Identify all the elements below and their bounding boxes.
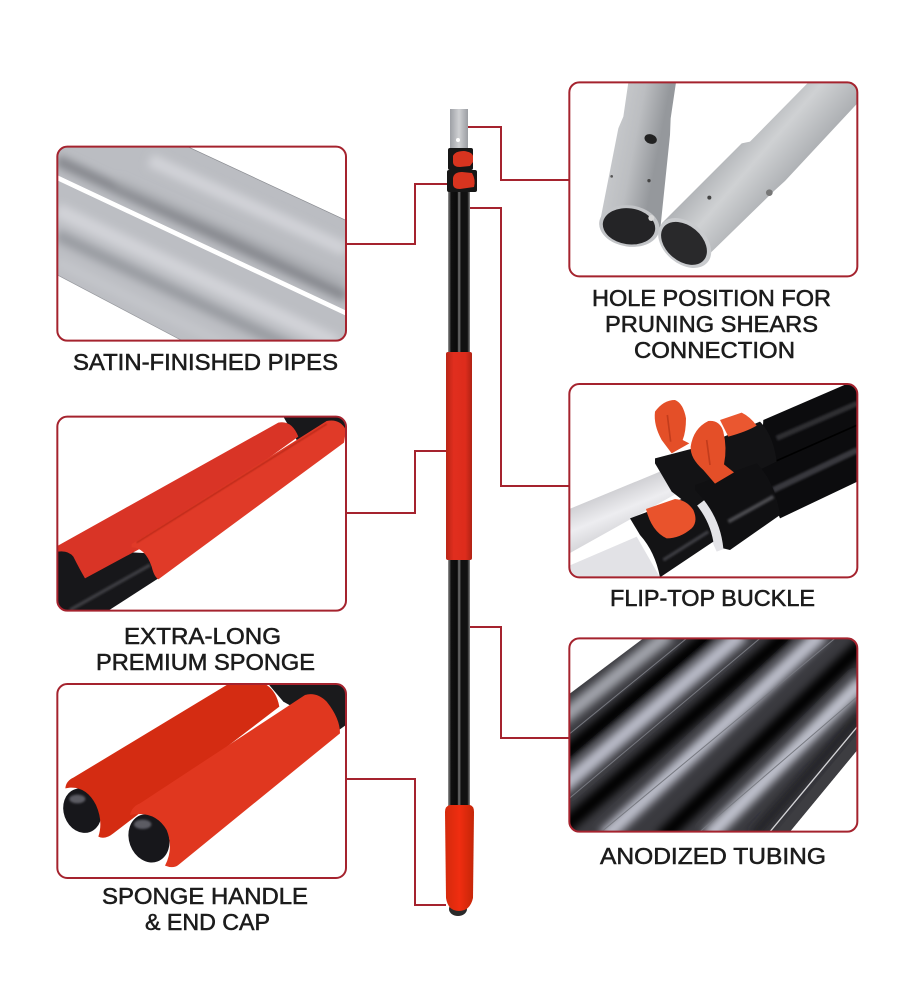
black tube ends bbox=[268, 684, 346, 732]
connector: anodized tubing bbox=[470, 627, 570, 738]
label: extra-long premium sponge bbox=[96, 623, 315, 675]
end cap right bbox=[128, 814, 170, 862]
lower white tube bbox=[569, 537, 660, 577]
label: extra-long premium sponge: EXTRA-LONG bbox=[124, 623, 281, 649]
label: hole position for pruning shears connection: PRUNING SHEARS bbox=[605, 311, 818, 337]
panel border bbox=[57, 684, 346, 878]
label: flip-top buckle: FLIP-TOP BUCKLE bbox=[610, 585, 815, 611]
panel: premium sponge bbox=[57, 417, 346, 611]
connector: flip-top buckle bbox=[470, 208, 570, 486]
front buckle lever bbox=[691, 421, 734, 484]
flat buckle lever bbox=[646, 499, 695, 538]
connector: hole position bbox=[466, 127, 570, 180]
panel border bbox=[569, 82, 857, 276]
front sponge bbox=[130, 694, 340, 867]
near clamp bbox=[630, 498, 713, 577]
label: anodized tubing: ANODIZED TUBING bbox=[600, 843, 826, 869]
lower silver tube bbox=[57, 180, 346, 353]
label: satin-finished pipes: SATIN-FINISHED PIPES bbox=[73, 349, 338, 375]
label: hole position for pruning shears connection bbox=[592, 285, 831, 363]
panel: flip-top buckle bbox=[569, 384, 857, 577]
label: sponge handle and end cap: SPONGE HANDLE bbox=[102, 883, 308, 909]
rear sponge bbox=[65, 685, 279, 838]
panel border bbox=[569, 384, 857, 577]
panel: sponge handle and end cap bbox=[57, 684, 346, 878]
front clamp bbox=[704, 469, 779, 550]
black tubes bbox=[567, 638, 857, 833]
label: hole position for pruning shears connection: HOLE POSITION FOR bbox=[592, 285, 831, 311]
rear sponge bbox=[57, 422, 298, 578]
back flat lever bbox=[720, 413, 757, 437]
connector: satin-finished pipes bbox=[346, 184, 448, 244]
panel: anodized tubing bbox=[567, 638, 857, 833]
rear buckle lever bbox=[655, 400, 689, 453]
panel: hole position for pruning shears bbox=[569, 82, 857, 278]
pole: lower clamp bbox=[447, 170, 477, 192]
black tube tip bbox=[283, 417, 346, 440]
label: hole position for pruning shears connection: CONNECTION bbox=[634, 337, 795, 363]
left silver tube bbox=[596, 82, 676, 251]
pole: upper black tube bbox=[448, 190, 470, 354]
panel border bbox=[57, 147, 346, 341]
central telescopic pole bbox=[445, 109, 477, 916]
pole: silver tip bbox=[450, 109, 468, 151]
connector: sponge handle bbox=[346, 779, 446, 905]
panel: satin-finished pipes bbox=[57, 147, 346, 353]
panel border bbox=[569, 638, 857, 832]
connector: premium sponge bbox=[346, 451, 446, 513]
panel border bbox=[57, 417, 346, 611]
white gap tube bbox=[697, 501, 724, 552]
pole: lower black tube bbox=[448, 558, 470, 808]
black tube section bbox=[57, 548, 158, 611]
pole: upper clamp bbox=[448, 148, 473, 170]
upper silver tube bbox=[57, 147, 346, 311]
label: sponge handle and end cap bbox=[102, 883, 308, 935]
pole: long red sponge bbox=[446, 352, 472, 560]
right silver tube bbox=[658, 83, 856, 268]
pole: red sponge grip bbox=[445, 805, 474, 911]
label: sponge handle and end cap: & END CAP bbox=[145, 909, 270, 935]
end cap left bbox=[63, 788, 100, 833]
black tubes bbox=[760, 384, 857, 518]
rear clamp bbox=[655, 422, 777, 508]
pole: bottom end cap bbox=[449, 902, 467, 916]
label: extra-long premium sponge: PREMIUM SPONGE bbox=[96, 649, 315, 675]
front sponge bbox=[132, 421, 346, 579]
upper white tube bbox=[569, 472, 680, 553]
